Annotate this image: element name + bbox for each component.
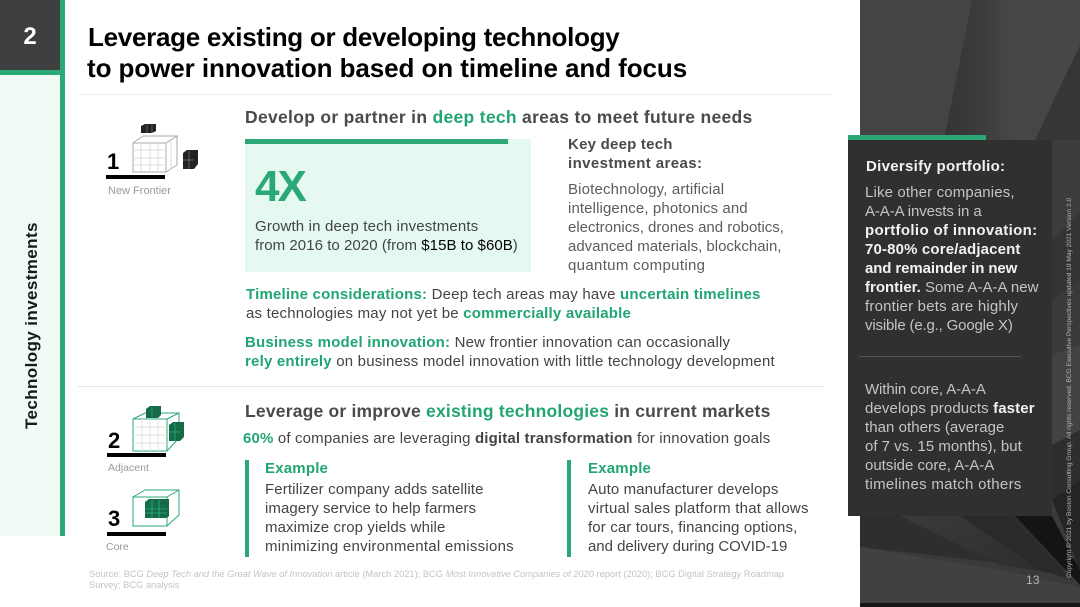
callout body second: of 7 vs. 15 months), but <box>865 438 1022 455</box>
mid divider <box>78 386 824 387</box>
stat bar <box>245 139 508 144</box>
title: to power innovation based on timeline and focus <box>87 53 687 83</box>
source note: Survey; BCG analysis <box>89 580 179 590</box>
icon: new frontier cube <box>132 124 198 172</box>
example text: Fertilizer company adds satellite <box>265 481 484 498</box>
timeline considerations <box>246 286 761 322</box>
example heading: Example <box>588 460 651 477</box>
example text: minimizing environmental emissions <box>265 538 514 555</box>
callout body: portfolio of innovation: <box>865 222 1038 239</box>
white slide panel <box>60 0 860 607</box>
caption: Core <box>106 541 129 553</box>
stat panel <box>245 139 531 272</box>
underline <box>106 175 165 179</box>
example heading: Example <box>265 460 328 477</box>
callout body: frontier bets are highly <box>865 298 1018 315</box>
example text: imagery service to help farmers <box>265 500 476 517</box>
callout body <box>865 184 1038 334</box>
callout divider <box>859 356 1021 357</box>
label: 3 core <box>106 506 166 553</box>
green bar <box>245 460 249 557</box>
number 1: 1 <box>107 149 119 174</box>
icon: core cube <box>132 490 180 526</box>
key areas list: Biotechnology, artificial <box>568 181 724 198</box>
green bar <box>567 460 571 557</box>
callout body second: than others (average <box>865 419 1004 436</box>
callout body: and remainder in new <box>865 260 1017 277</box>
callout body: visible (e.g., Google X) <box>865 317 1013 334</box>
example text: for car tours, financing options, <box>588 519 797 536</box>
number 2: 2 <box>108 428 120 453</box>
key areas list: advanced materials, blockchain, <box>568 238 781 255</box>
callout body: Like other companies, <box>865 184 1015 201</box>
label: 2 adjacent <box>107 428 166 474</box>
callout body: A-A-A invests in a <box>865 203 982 220</box>
key areas heading: investment areas: <box>568 155 702 172</box>
label: 1 new frontier <box>106 149 171 197</box>
stat value: 4X <box>255 162 305 211</box>
example text: Auto manufacturer develops <box>588 481 778 498</box>
stat text: from 2016 to 2020 (from $15B to $60B) <box>255 237 518 254</box>
section number tab <box>0 0 60 70</box>
example text: maximize crop yields while <box>265 519 445 536</box>
page number: 13 <box>1026 573 1040 587</box>
source note <box>89 569 784 590</box>
title: Leverage existing or developing technology <box>88 22 619 52</box>
underline <box>107 532 166 536</box>
callout panel <box>848 140 1052 516</box>
callout body: frontier. Some A-A-A new <box>865 279 1038 296</box>
section number tab: 2 <box>23 23 37 50</box>
source note: Source: BCG Deep Tech and the Great Wave of Innovation article (March 2021); BCG Most Innovative Companies of 2020 report (2020); BCG Digital Strategy Roadmap <box>89 569 784 579</box>
callout body second <box>865 381 1035 493</box>
key areas heading <box>568 136 702 172</box>
timeline considerations: Timeline considerations: Deep tech areas may have uncertain timelines <box>246 286 761 303</box>
left sidebar <box>0 0 65 607</box>
key areas list: intelligence, photonics and <box>568 200 748 217</box>
green rule vertical <box>60 0 65 536</box>
example text <box>265 481 514 555</box>
callout body second: timelines match others <box>865 476 1022 493</box>
callout bar <box>848 135 986 140</box>
callout body second: Within core, A-A-A <box>865 381 986 398</box>
business model innovation <box>245 334 775 370</box>
key areas heading: Key deep tech <box>568 136 673 153</box>
mint sidebar band <box>0 74 60 536</box>
stat text: Growth in deep tech investments <box>255 218 478 235</box>
icon: adjacent cube <box>132 406 184 452</box>
heading: deep tech: Develop or partner in deep tech areas to meet future needs <box>245 107 753 127</box>
business model innovation: Business model innovation: New frontier innovation can occasionally <box>245 334 730 351</box>
underline <box>107 453 166 457</box>
example text: virtual sales platform that allows <box>588 500 809 517</box>
title <box>87 22 687 83</box>
timeline considerations: as technologies may not yet be commercially available <box>246 305 631 322</box>
callout body: 70-80% core/adjacent <box>865 241 1021 258</box>
key areas list <box>568 181 784 274</box>
example text: and delivery during COVID-19 <box>588 538 787 555</box>
callout heading: Diversify portfolio: <box>866 158 1005 175</box>
business model innovation: rely entirely on business model innovation with little technology development <box>245 353 775 370</box>
heading: existing technologies: Leverage or improve existing technologies in current markets <box>245 401 771 421</box>
caption: Adjacent <box>108 462 149 474</box>
stat text <box>255 218 518 254</box>
digital transformation stat: 60% of companies are leveraging digital transformation for innovation goals <box>243 430 770 447</box>
key areas list: quantum computing <box>568 257 705 274</box>
copyright: Copyright © 2021 by Boston Consulting Group. All rights reserved. BCG Executive Perspectives updated 19 May 2021 Version 2.0 <box>1066 198 1073 578</box>
green rule horizontal <box>0 70 60 75</box>
key areas list: electronics, drones and robotics, <box>568 219 784 236</box>
sidebar vertical label: Technology investments <box>22 222 41 429</box>
callout body second: develops products faster <box>865 400 1035 417</box>
example text <box>588 481 809 555</box>
title divider <box>78 94 832 95</box>
number 3: 3 <box>108 506 120 531</box>
callout body second: outside core, A-A-A <box>865 457 994 474</box>
example right <box>567 460 809 557</box>
caption: New Frontier <box>108 185 171 197</box>
example left <box>245 460 514 557</box>
